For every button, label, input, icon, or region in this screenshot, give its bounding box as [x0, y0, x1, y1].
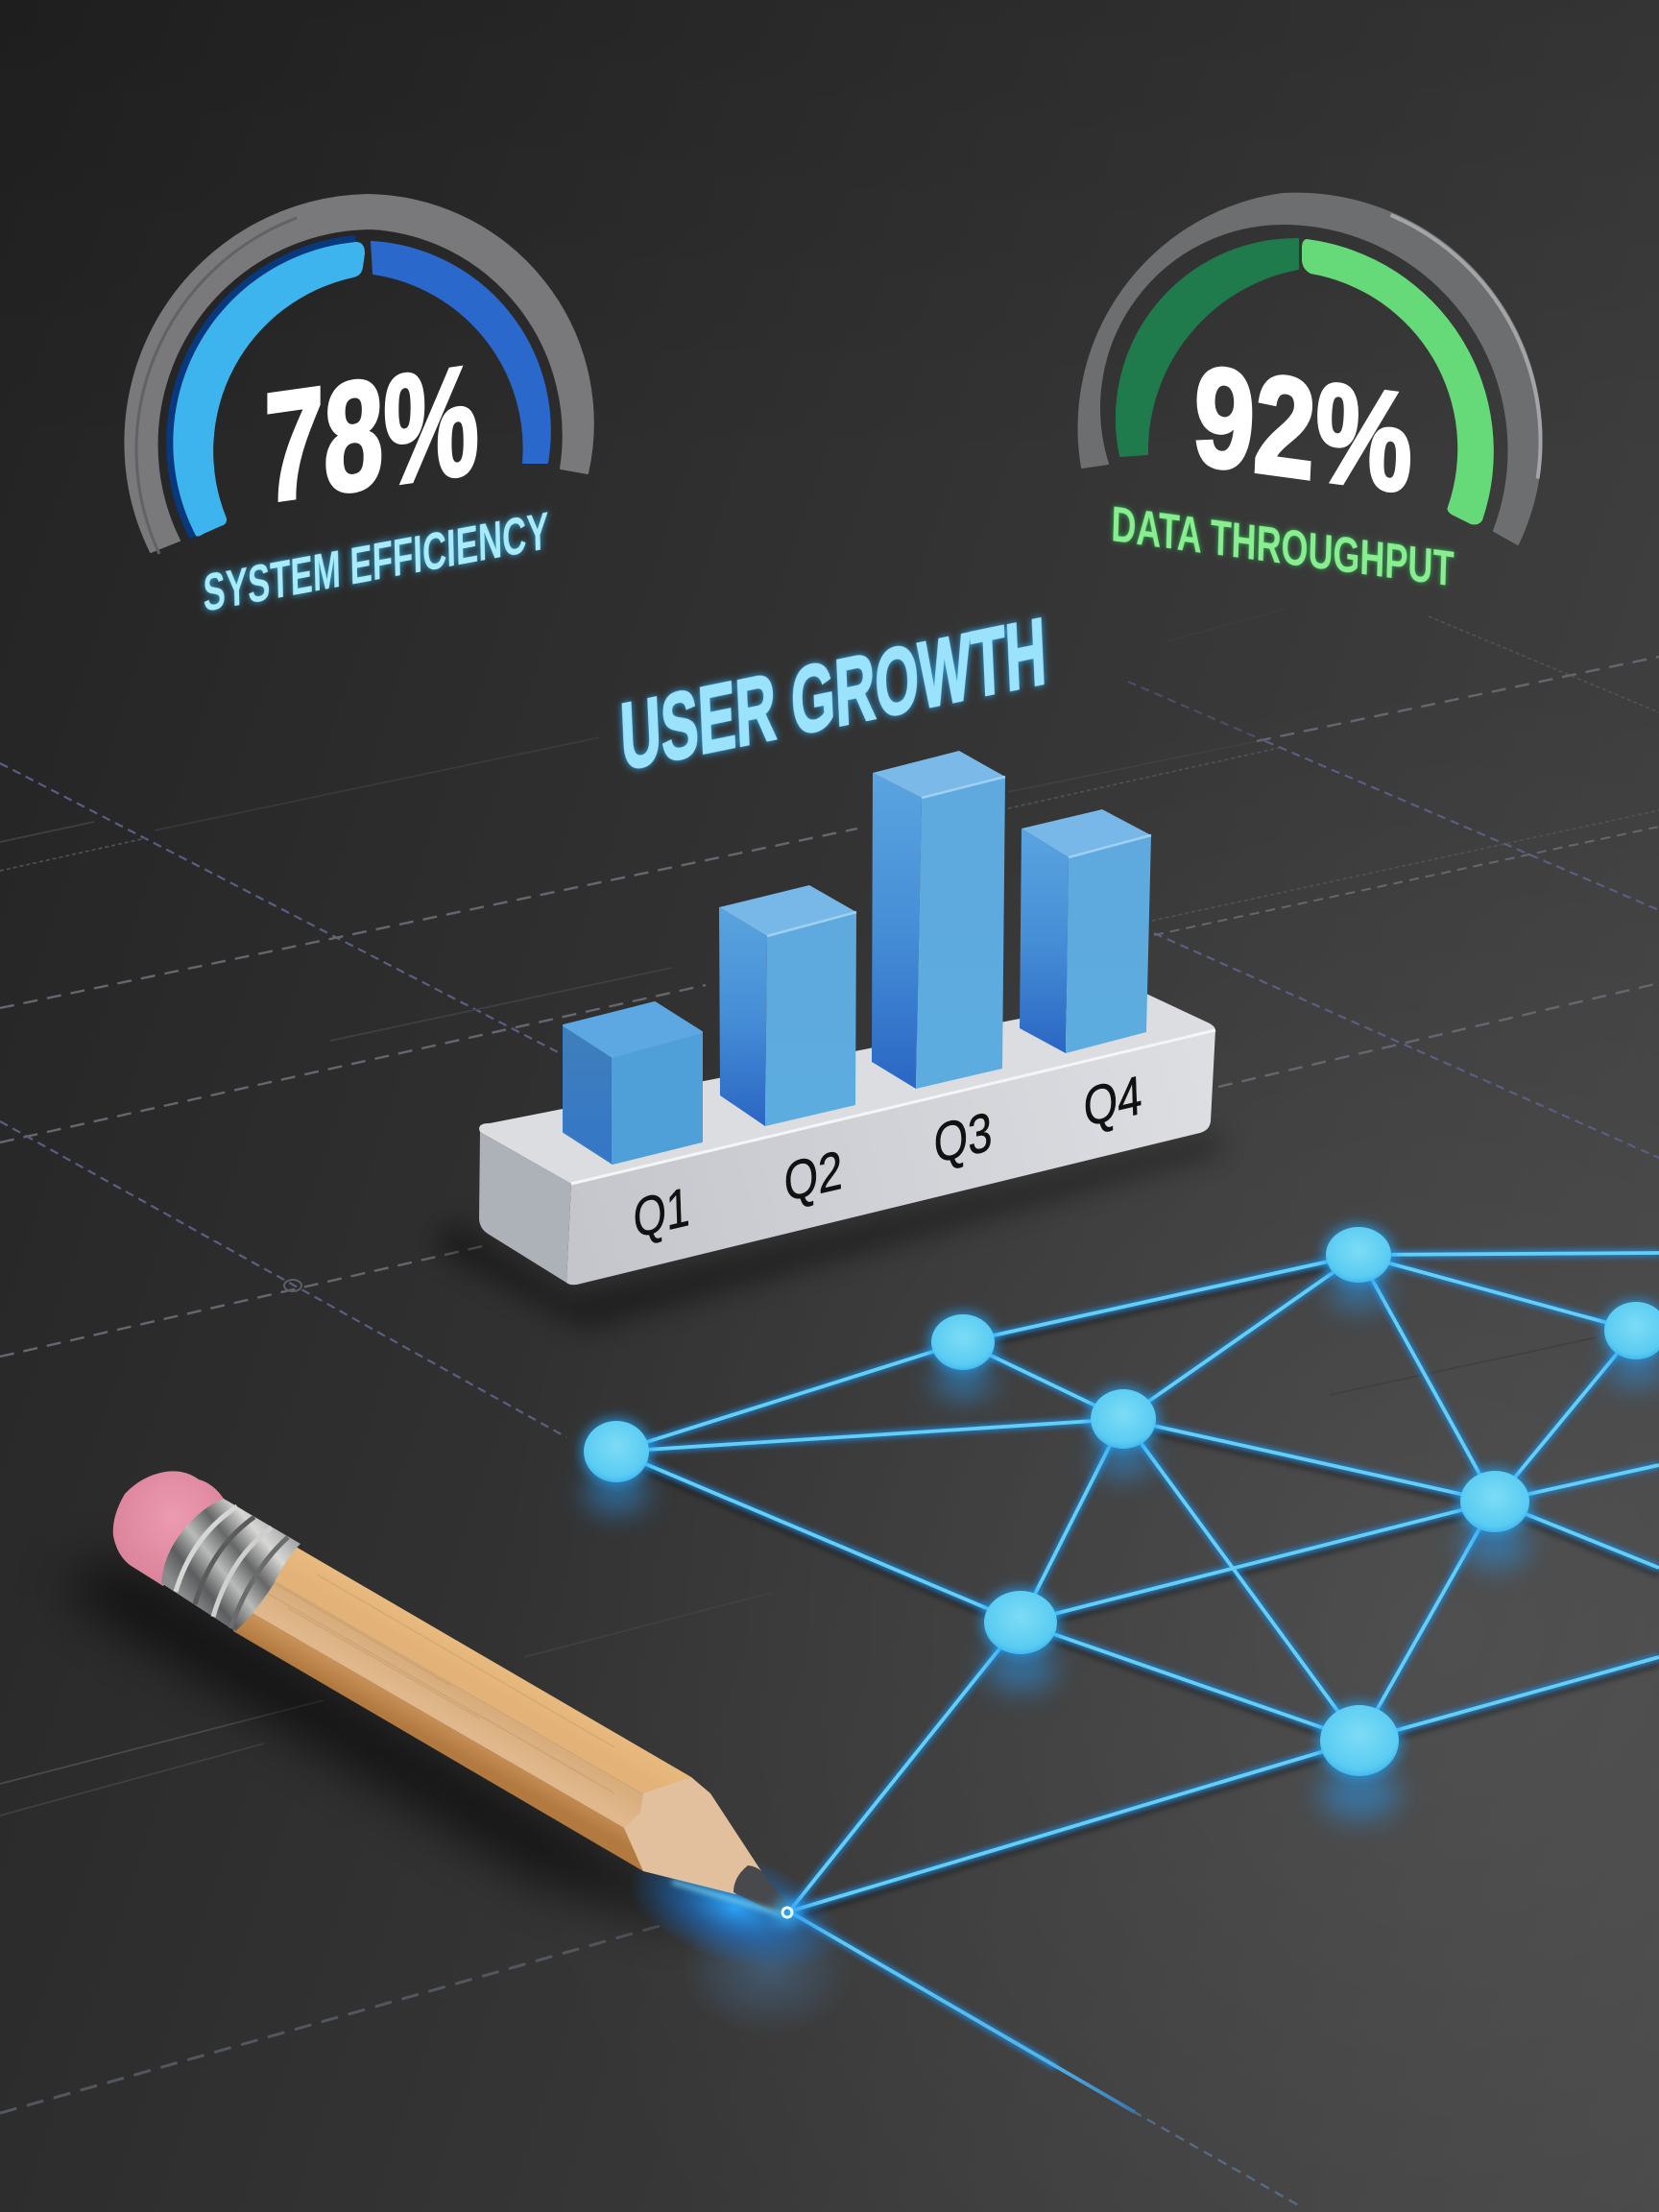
gauge filled segment bright green [1302, 239, 1494, 524]
glowing tip point [672, 1882, 801, 1926]
gauge label: DATA THROUGHPUT [1111, 496, 1455, 598]
graphite tip [733, 1865, 789, 1915]
node 2 [931, 1314, 995, 1370]
bar Q1 [564, 1002, 702, 1164]
background grid lines [0, 609, 1659, 2113]
label Q2: Q2 [783, 1139, 843, 1213]
gauge outer grey ring [125, 195, 593, 554]
glowing network diagram [582, 1225, 1659, 2207]
bar Q2 [719, 885, 856, 1126]
gauge value 92%: 92% [1190, 336, 1416, 522]
node 4 [1604, 1302, 1659, 1359]
gauge filled segment light blue [173, 242, 365, 537]
node 1 [584, 1421, 649, 1482]
gauge label: SYSTEM EFFICIENCY [203, 501, 549, 623]
label Q3: Q3 [933, 1100, 993, 1174]
gauge remaining segment dark green [1117, 239, 1298, 456]
node 6 [1460, 1471, 1529, 1532]
eraser [113, 1471, 224, 1586]
node 3 [1326, 1227, 1391, 1283]
node reflections [584, 1272, 1659, 1820]
node 5 [1091, 1389, 1156, 1449]
bar chart: user growth [432, 598, 1219, 1330]
wooden shaft [230, 1547, 701, 1871]
gauge value 78%: 78% [264, 332, 479, 536]
base plinth shadow [432, 1133, 1219, 1330]
network edge shadow [616, 1262, 1659, 1918]
label Q1: Q1 [633, 1175, 690, 1249]
network edges [616, 1253, 1659, 1911]
pencil [58, 1471, 856, 2035]
sharpened cone [624, 1777, 761, 1894]
node halos [582, 1225, 1659, 1778]
chart base plinth [479, 994, 1215, 1285]
gauge: system efficiency [125, 195, 593, 623]
chart title: USER GROWTH [618, 598, 1048, 790]
node 7 [984, 1591, 1057, 1654]
network edge glow [616, 1253, 1659, 2067]
fading line from the pencil tip [789, 1911, 1135, 2112]
tip glow on the desk [613, 1823, 856, 1994]
pencil shadow [58, 1560, 730, 1920]
gauge remaining segment dark blue [372, 242, 550, 463]
gauge: data throughput [1079, 194, 1542, 598]
gauge dark inner groove [173, 242, 356, 536]
bar Q3 [872, 751, 1005, 1089]
label Q4: Q4 [1083, 1064, 1142, 1138]
bar Q4 [1020, 809, 1151, 1053]
dashed tail of the drawn line [1133, 2111, 1302, 2207]
gauge outer grey ring [1079, 194, 1542, 546]
node 8 [1320, 1705, 1399, 1776]
desk reflection below tip [682, 1901, 854, 2035]
metal ferrule [161, 1499, 301, 1631]
